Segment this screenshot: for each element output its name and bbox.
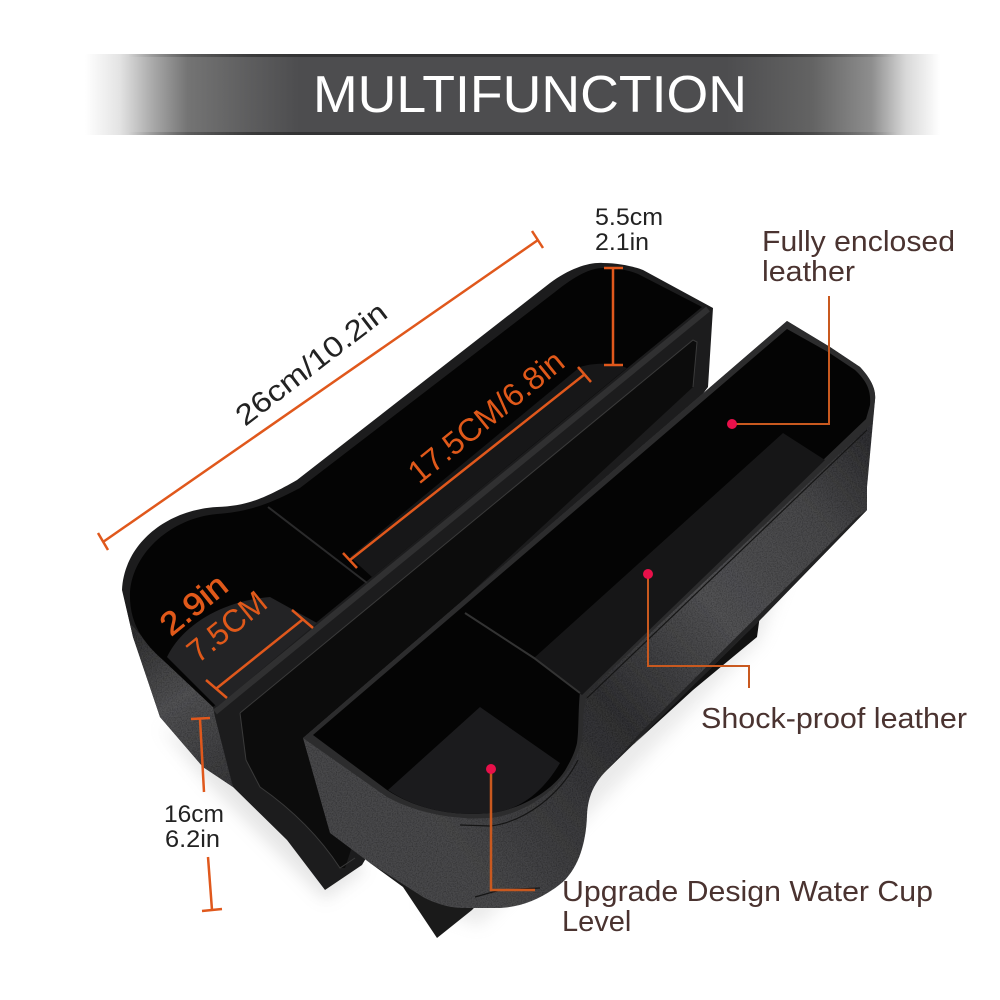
long compartment floor: [350, 364, 627, 577]
cup compartment floor: [167, 597, 317, 707]
rear organizer outer body: [122, 263, 713, 890]
product: front organizer: [303, 321, 875, 938]
stitching on front panel: [240, 340, 697, 868]
dimension: cup width 7.5cm: 7.5CM: [180, 584, 274, 669]
cup width labels: 2.9in: [153, 567, 234, 642]
height label: 16cm: [164, 801, 224, 828]
product: rear organizer: [122, 263, 713, 900]
length label: 26cm/10.2in: [230, 296, 394, 433]
title: MULTIFUNCTION: [313, 66, 747, 124]
dimension: depth 5.5cm: [595, 204, 663, 365]
dark lower trim: [598, 510, 867, 780]
rear organizer interior: [130, 268, 702, 707]
cup compartment floor: [388, 707, 560, 814]
callout text: Upgrade Design Water Cup: [562, 876, 933, 908]
depth label: 2.1in: [595, 229, 649, 256]
callout: water cup level: [486, 764, 933, 938]
callout text: leather: [762, 256, 855, 288]
soft shadow: [420, 560, 790, 925]
compartment divider: [465, 613, 580, 693]
compartment divider: [268, 507, 367, 583]
base block under middle: [633, 615, 760, 745]
dimension: compartment 17.5cm: [343, 343, 591, 568]
depth label: 5.5cm: [595, 204, 663, 231]
callout text: Fully enclosed: [762, 226, 955, 258]
callout text: Shock-proof leather: [701, 703, 967, 735]
dimension: cup width 7.5cm: [153, 567, 313, 698]
height label: 6.2in: [165, 826, 220, 853]
callout: fully enclosed leather: [727, 226, 955, 429]
dimension: overall length 26cm: [98, 231, 543, 550]
leather outer wall: [303, 321, 875, 908]
rear organizer rim line: [215, 309, 708, 712]
base block under cup: [370, 863, 500, 938]
upper rim: [303, 321, 875, 818]
compartment label: 17.5CM/6.8in: [401, 343, 571, 490]
front organizer interior: [313, 329, 870, 814]
soft shadow: [160, 725, 365, 900]
grey leather end panel: [123, 593, 233, 787]
front leather panel inside stitching: [240, 340, 697, 868]
callout: shock-proof leather: [643, 569, 967, 735]
stitching on leather: [460, 430, 867, 897]
long compartment floor: [534, 433, 825, 695]
callout text: Level: [562, 906, 631, 938]
dimension: height 16cm: [164, 718, 224, 911]
title banner: [85, 54, 940, 135]
